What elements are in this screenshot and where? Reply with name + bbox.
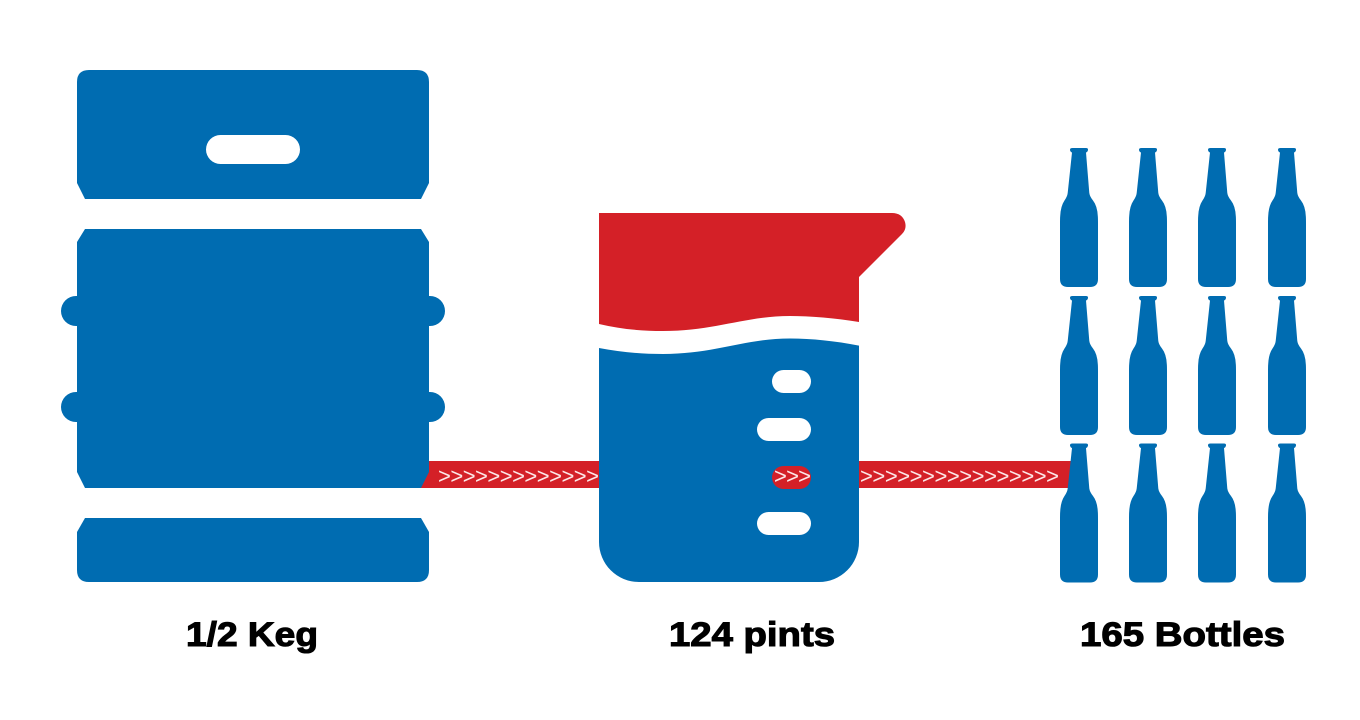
connector band: keg to pitcher — [419, 461, 600, 488]
label: keg: 1/2 Keg — [186, 616, 318, 654]
chevrons: keg to pitcher: >>>>>>>>>>>>> — [438, 464, 599, 488]
keg bottom section — [77, 518, 429, 582]
icon: grid of twelve bottles — [1060, 148, 1306, 582]
label: pints: 124 pints — [669, 616, 835, 654]
keg middle body with side ribs — [61, 229, 445, 488]
pitcher bottom in blue with measure marks — [599, 338, 859, 582]
keg top section with handle slot — [77, 70, 429, 199]
connector band: pitcher to bottles — [858, 461, 1072, 488]
label: bottles: 165 Bottles — [1080, 616, 1285, 654]
pitcher top in red — [599, 213, 906, 331]
red measure mark with chevrons: >>> — [774, 464, 811, 488]
chevrons: pitcher to bottles: >>>>>>>>>>>>>>>> — [860, 464, 1059, 488]
icon: half keg — [61, 70, 445, 582]
icon: measuring pitcher — [599, 213, 906, 582]
